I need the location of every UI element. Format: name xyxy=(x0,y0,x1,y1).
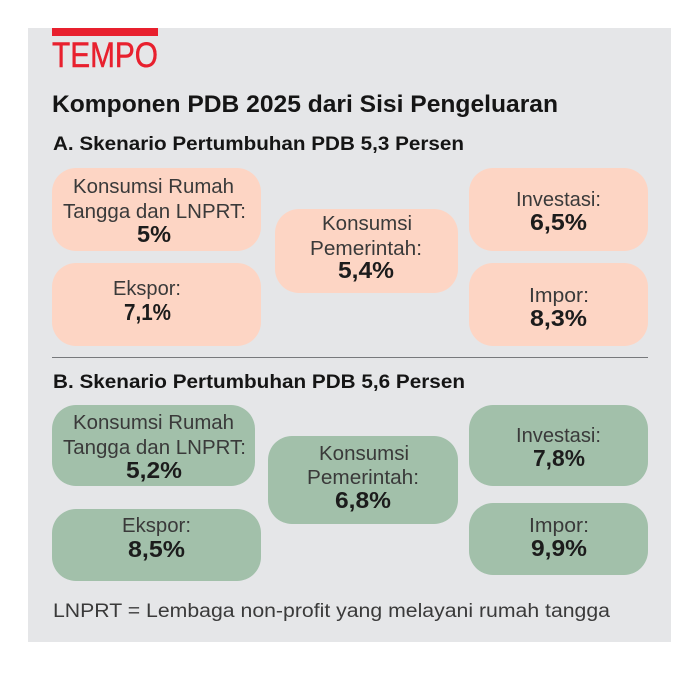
card: investment A: 6,5% xyxy=(530,209,587,235)
card: household consumption B: Tangga dan LNPRT: xyxy=(63,437,246,459)
card: household consumption B: Konsumsi Rumah xyxy=(73,412,234,434)
card: household consumption A: 5% xyxy=(137,221,171,247)
card: export B: Ekspor: xyxy=(122,515,191,537)
card: investment A: Investasi: xyxy=(516,189,601,211)
card: government consumption A xyxy=(275,209,458,293)
footnote: LNPRT = Lembaga non-profit yang melayani rumah tangga xyxy=(53,601,610,622)
card: export A: Ekspor: xyxy=(113,278,181,300)
card: investment B xyxy=(469,405,648,486)
card: import B xyxy=(469,503,648,575)
section A: scenario 5,3 percent xyxy=(52,134,648,346)
card: import A: Impor: xyxy=(529,285,589,307)
card: government consumption A: Pemerintah: xyxy=(310,238,422,260)
section B: scenario 5,6 percent xyxy=(52,372,648,581)
heading: section A: A. Skenario Pertumbuhan PDB 5,3 Persen xyxy=(53,134,464,155)
card: export A: 7,1% xyxy=(124,299,171,325)
card: import B: 9,9% xyxy=(531,535,587,561)
card: government consumption A: 5,4% xyxy=(338,257,394,283)
card: household consumption B xyxy=(52,405,255,486)
card: import A xyxy=(469,263,648,346)
card: household consumption A: Konsumsi Rumah xyxy=(73,176,234,198)
logo: Tempo: TEMPO xyxy=(52,36,158,75)
card: government consumption B: 6,8% xyxy=(335,487,391,513)
card: government consumption B: Konsumsi xyxy=(319,443,409,465)
card: government consumption A: Konsumsi xyxy=(322,213,412,235)
card: investment A xyxy=(469,168,648,251)
card: government consumption B: Pemerintah: xyxy=(307,467,419,489)
card: export B xyxy=(52,509,261,581)
heading: section B: B. Skenario Pertumbuhan PDB 5,6 Persen xyxy=(53,372,465,393)
card: investment B: Investasi: xyxy=(516,425,601,447)
card: import A: 8,3% xyxy=(530,305,587,331)
card: export B: 8,5% xyxy=(128,536,185,562)
card: household consumption A xyxy=(52,168,261,251)
card: export A xyxy=(52,263,261,346)
title: Komponen PDB 2025 dari Sisi Pengeluaran xyxy=(52,91,558,118)
card: household consumption B: 5,2% xyxy=(126,457,182,483)
card: import B: Impor: xyxy=(529,515,589,537)
card: investment B: 7,8% xyxy=(533,445,585,471)
card: government consumption B xyxy=(268,436,458,524)
card: household consumption A: Tangga dan LNPRT: xyxy=(63,201,246,223)
